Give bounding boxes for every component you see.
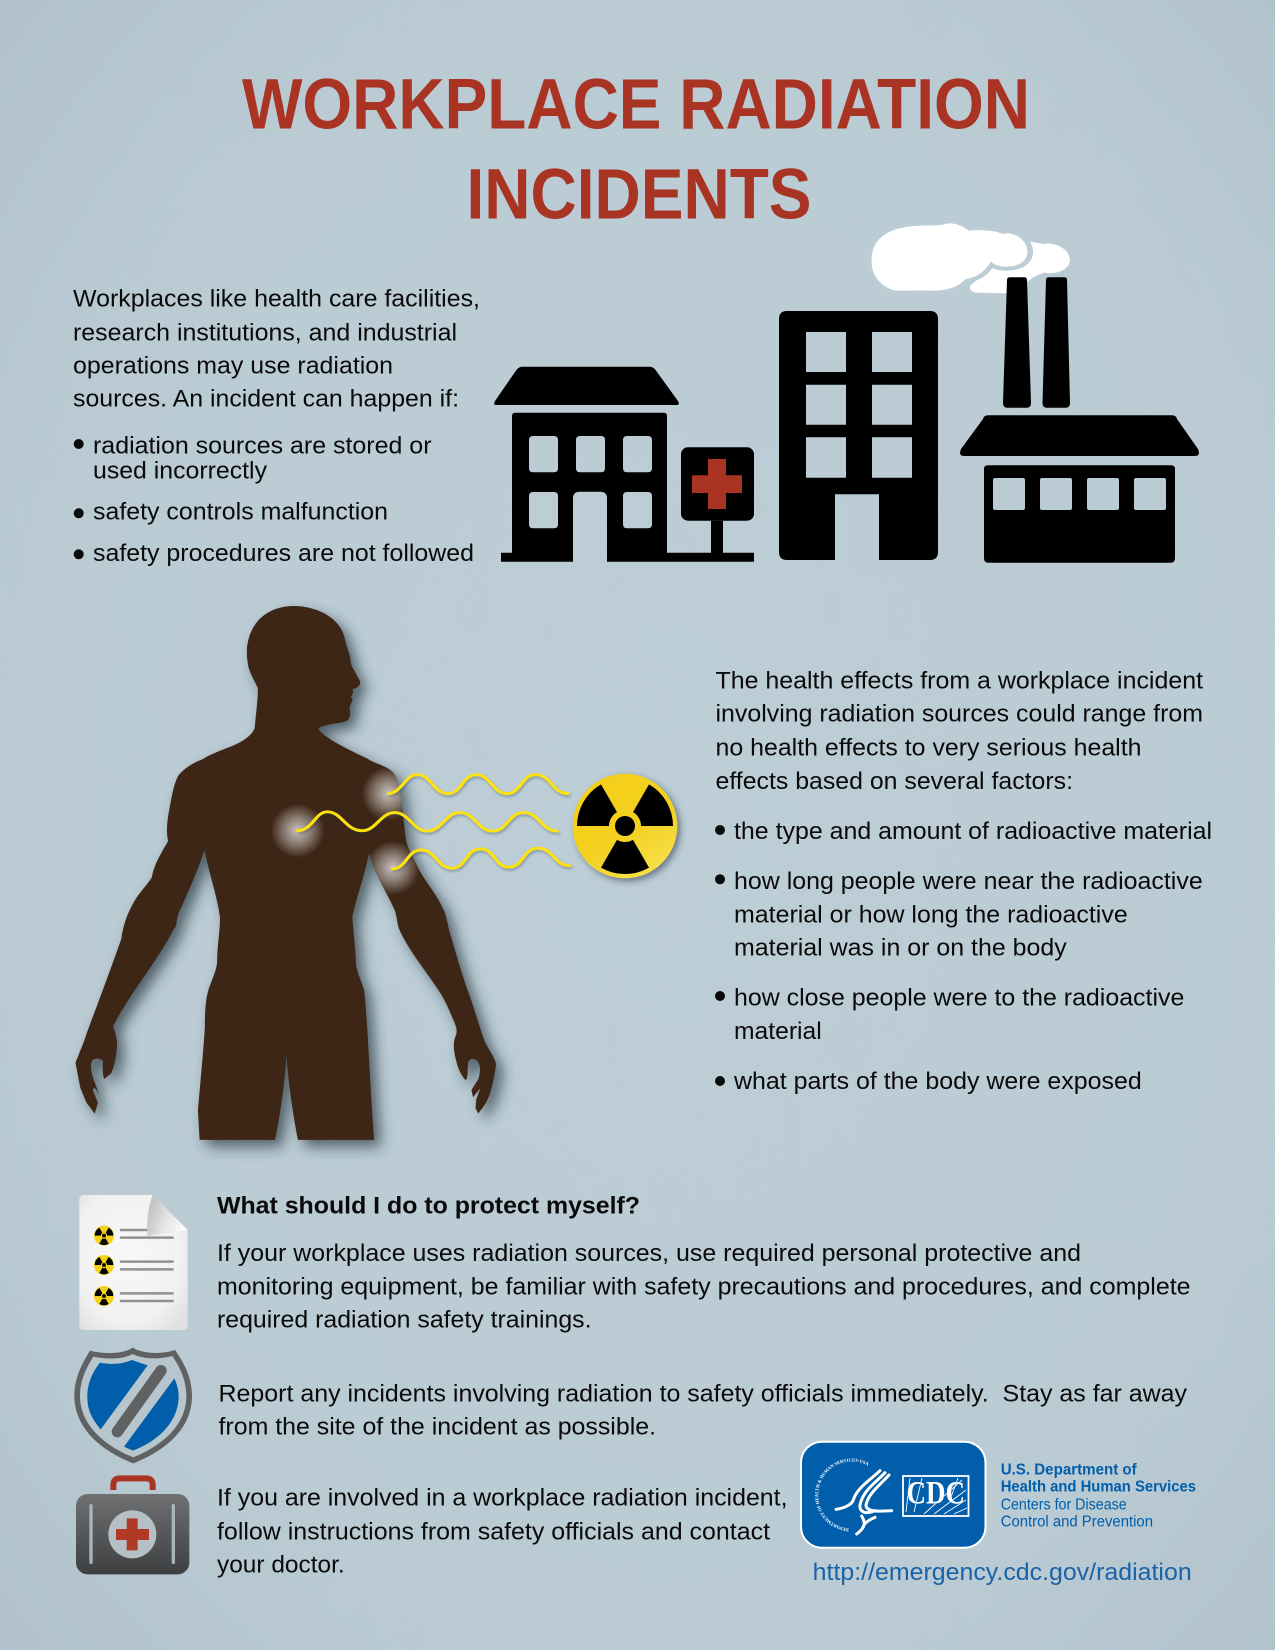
icon: first aid kit — [76, 1478, 189, 1574]
doctor paragraph: your doctor. — [217, 1552, 345, 1579]
incident causes bullet list: safety controls malfunction — [93, 498, 388, 525]
hospital building — [494, 367, 754, 562]
icon: buildings — [494, 223, 1199, 563]
health effects text block: no health effects to very serious health — [716, 735, 1142, 762]
agency names: Health and Human Services — [1001, 1479, 1196, 1496]
health factors bullet list: material — [734, 1018, 822, 1045]
website url: http://emergency.cdc.gov/radiation — [813, 1559, 1192, 1586]
HHS eagle — [836, 1471, 892, 1534]
health factors bullet list — [715, 818, 1212, 1095]
incident causes bullet list — [74, 432, 474, 567]
health factors bullet list: the type and amount of radioactive material — [734, 818, 1212, 845]
report paragraph: from the site of the incident as possible. — [218, 1413, 656, 1440]
CDC mark: CDC — [906, 1475, 965, 1511]
icon: checklist document — [79, 1195, 188, 1330]
title: INCIDENTS — [466, 155, 812, 234]
hospital sign — [681, 447, 754, 521]
human silhouette — [76, 606, 496, 1140]
HHS circular text: DEPARTMENT OF HEALTH & HUMAN SERVICES·USA — [815, 1458, 868, 1532]
health factors bullet list: material was in or on the body — [734, 935, 1067, 962]
intro text block: sources. An incident can happen if: — [73, 386, 459, 413]
incident causes bullet list: used incorrectly — [93, 457, 267, 484]
report paragraph — [218, 1381, 1187, 1440]
protect paragraph — [217, 1240, 1190, 1334]
exposure glow spots — [271, 767, 420, 895]
office tower — [779, 311, 938, 560]
radiation waves — [298, 775, 569, 869]
doctor paragraph: follow instructions from safety officials and contact — [217, 1518, 770, 1545]
health factors bullet list: how close people were to the radioactive — [734, 985, 1184, 1012]
report paragraph: Report any incidents involving radiation to safety officials immediately. Stay as far away — [218, 1381, 1187, 1408]
intro text block — [73, 286, 480, 413]
intro text block: research institutions, and industrial — [73, 320, 457, 347]
health factors bullet list: material or how long the radioactive — [734, 901, 1128, 928]
intro text block: operations may use radiation — [73, 352, 393, 379]
protect paragraph: required radiation safety trainings. — [217, 1307, 592, 1334]
agency names: U.S. Department of — [1001, 1461, 1138, 1478]
health effects text block — [716, 667, 1203, 795]
doctor paragraph: If you are involved in a workplace radiation incident, — [217, 1485, 788, 1512]
factory — [960, 277, 1199, 563]
health effects text block: The health effects from a workplace incident — [716, 667, 1203, 694]
intro text block: Workplaces like health care facilities, — [73, 286, 480, 313]
logo: HHS and CDC — [800, 1440, 986, 1549]
incident causes bullet list: safety procedures are not followed — [93, 540, 474, 567]
agency names: Centers for Disease — [1001, 1496, 1127, 1513]
agency names — [1001, 1461, 1196, 1531]
incident causes bullet list: radiation sources are stored or — [93, 432, 432, 459]
title — [242, 65, 1030, 234]
protect paragraph: monitoring equipment, be familiar with safety precautions and procedures, and complete — [217, 1273, 1190, 1300]
health effects text block: effects based on several factors: — [716, 768, 1073, 795]
agency names: Control and Prevention — [1001, 1514, 1153, 1531]
health effects text block: involving radiation sources could range from — [716, 701, 1203, 728]
health factors bullet list: what parts of the body were exposed — [733, 1068, 1142, 1095]
protect paragraph: If your workplace uses radiation sources, use required personal protective and — [217, 1240, 1081, 1267]
title: WORKPLACE RADIATION — [242, 65, 1030, 144]
health factors bullet list: how long people were near the radioactive — [734, 868, 1203, 895]
icon: radiation symbol — [573, 774, 677, 878]
icon: shield — [74, 1348, 192, 1463]
doctor paragraph — [217, 1485, 788, 1579]
protect heading: What should I do to protect myself? — [217, 1192, 640, 1219]
smoke cloud — [872, 223, 1070, 293]
